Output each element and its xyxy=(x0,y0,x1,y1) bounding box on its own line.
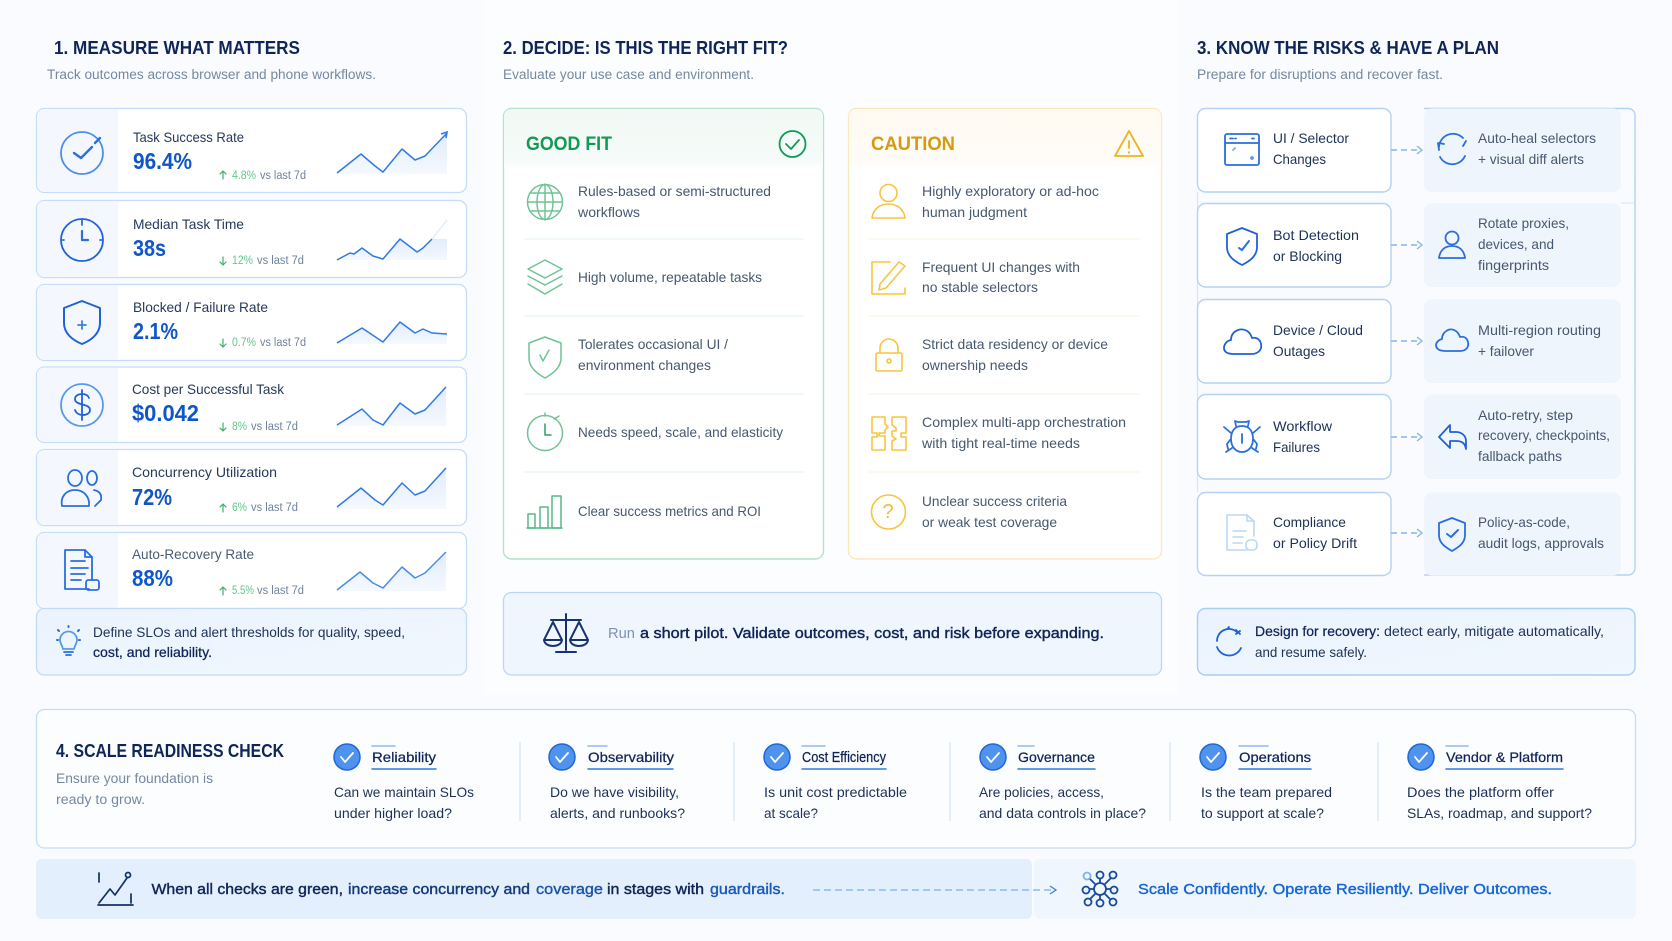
check item: cost efficiency: Cost Efficiency xyxy=(802,749,886,766)
metric card: median task time: 12% xyxy=(232,255,253,267)
risk row: workflow failures: Workflow xyxy=(1273,418,1333,434)
arrow xyxy=(1391,433,1422,441)
arrow xyxy=(1391,241,1422,249)
risk row: compliance drift xyxy=(1198,492,1621,576)
item: success metrics xyxy=(527,496,761,528)
banner: scale confidently: Scale Confidently. Operate Resiliently. Deliver Outcomes. xyxy=(1138,881,1552,898)
item: tolerates changes xyxy=(529,336,728,378)
sparkline xyxy=(337,468,446,509)
icon: clock xyxy=(61,219,103,261)
panel: know the risks xyxy=(1197,37,1635,675)
risk row: workflow failures: recovery, checkpoints, xyxy=(1478,427,1610,443)
check item: operations: Operations xyxy=(1239,749,1311,765)
text: scale readiness description: Ensure your foundation is xyxy=(56,771,213,786)
panel: good fit xyxy=(504,108,824,559)
icon: person xyxy=(872,184,905,218)
check item: observability: Do we have visibility, xyxy=(550,784,679,800)
panel: scale readiness check xyxy=(36,710,1636,848)
risk row: compliance drift: audit logs, approvals xyxy=(1478,535,1604,551)
check item: reliability: under higher load? xyxy=(334,805,452,821)
metric card: concurrency utilization: 6% xyxy=(232,502,247,514)
metric card: concurrency utilization xyxy=(36,450,466,526)
icon: document xyxy=(65,550,99,590)
item: rules-based xyxy=(528,183,771,220)
icon: refresh xyxy=(1438,134,1466,164)
icon: shield check xyxy=(529,337,561,378)
metric card: blocked failure rate: vs last 7d xyxy=(260,337,306,349)
subheading: measure: Track outcomes across browser and phone workflows. xyxy=(47,67,376,82)
risk row: workflow failures: Failures xyxy=(1273,439,1320,455)
item: rules-based: workflows xyxy=(577,204,640,220)
metric card: auto-recovery rate: 88% xyxy=(132,565,173,591)
panel: decide fit xyxy=(503,37,1162,675)
icon: return arrow xyxy=(1439,425,1466,449)
metric card: blocked failure rate: 0.7% xyxy=(232,337,256,349)
metric card: median task time: 38s xyxy=(133,235,166,261)
item: orchestration: Complex multi-app orchestration xyxy=(922,414,1126,430)
arrow xyxy=(1391,146,1422,154)
item: orchestration: with tight real-time needs xyxy=(921,435,1080,451)
callout: define SLOs: Define SLOs and alert thresholds for quality, speed, xyxy=(93,624,405,640)
risk row: UI selector changes: Auto-heal selectors xyxy=(1478,130,1596,146)
callout: design for recovery: and resume safely. xyxy=(1255,644,1367,660)
icon: cloud xyxy=(1436,329,1468,351)
sparkline xyxy=(337,220,447,260)
item: orchestration xyxy=(872,414,1126,451)
check item: operations: to support at scale? xyxy=(1201,805,1324,821)
arrow: checks to outcome xyxy=(813,886,1056,894)
metric card: cost per successful task: $0.042 xyxy=(132,400,199,426)
icon: people xyxy=(62,470,101,506)
icon: stacked layers xyxy=(528,260,562,294)
item: exploratory: human judgment xyxy=(922,204,1027,220)
item: speed and scale xyxy=(528,413,783,450)
risk row: device cloud outages xyxy=(1198,300,1621,383)
icon: recovery loop xyxy=(1217,627,1241,656)
check item: operations: Is the team prepared xyxy=(1201,784,1332,800)
icon: cloud xyxy=(1224,329,1261,354)
sparkline xyxy=(337,387,446,426)
metric card: concurrency utilization: vs last 7d xyxy=(251,502,298,514)
check item: governance: and data controls in place? xyxy=(979,805,1146,821)
risk row: bot detection: Bot Detection xyxy=(1273,227,1359,243)
check item: governance: Governance xyxy=(1018,749,1095,765)
metric card: task success rate: 96.4% xyxy=(133,148,192,174)
item: data residency xyxy=(876,336,1108,373)
panel: measure what matters xyxy=(36,37,466,675)
callout: design for recovery: Design for recovery: xyxy=(1255,623,1380,639)
icon: globe xyxy=(528,184,562,220)
icon: shield xyxy=(64,301,100,344)
heading: good fit: GOOD FIT xyxy=(526,134,612,155)
icon: check circle xyxy=(780,131,806,157)
icon: puzzle xyxy=(872,417,906,450)
icon: balance scales xyxy=(544,614,588,652)
icon: bug xyxy=(1224,421,1260,452)
metric card: auto-recovery rate: 5.5% xyxy=(232,585,254,597)
banner: increase concurrency: in stages with xyxy=(607,881,704,898)
check item: cost efficiency: Is unit cost predictable xyxy=(764,784,907,800)
risk row: UI selector changes: Changes xyxy=(1273,151,1326,167)
item: high volume xyxy=(528,260,762,294)
icon: network xyxy=(1082,872,1118,906)
icon: shield xyxy=(1227,228,1257,265)
heading: caution: CAUTION xyxy=(871,134,955,155)
callout: run a short pilot: a short pilot. Validate outcomes, cost, and risk before expanding. xyxy=(640,625,1104,642)
icon: warning triangle xyxy=(1115,131,1143,156)
item: frequent UI changes xyxy=(872,259,1080,295)
sparkline xyxy=(337,132,447,174)
metric card: task success rate: vs last 7d xyxy=(260,170,306,182)
check item: reliability xyxy=(334,744,474,821)
item: unclear success xyxy=(872,493,1067,530)
banner: increase concurrency: guardrails. xyxy=(710,881,785,898)
icon: person xyxy=(1439,232,1465,258)
metric card: auto-recovery rate: Auto-Recovery Rate xyxy=(132,546,254,562)
banner: increase concurrency: coverage xyxy=(536,881,603,898)
heading: scale readiness: 4. SCALE READINESS CHECK xyxy=(56,740,285,761)
sparkline xyxy=(337,322,447,344)
callout: run a short pilot xyxy=(504,592,1162,675)
check item: governance: Are policies, access, xyxy=(979,784,1104,800)
risk row: bot detection: Rotate proxies, xyxy=(1478,215,1569,231)
callout: define SLOs: cost, and reliability. xyxy=(93,644,212,660)
metric card: blocked failure rate: Blocked / Failure Rate xyxy=(133,299,268,315)
risk row: UI selector changes: + visual diff alerts xyxy=(1478,151,1584,167)
icon: light bulb xyxy=(57,626,80,655)
risk row: bot detection: devices, and xyxy=(1478,236,1554,252)
check item: reliability: Can we maintain SLOs xyxy=(334,784,474,800)
risk row: UI selector changes xyxy=(1198,108,1621,192)
check item: vendor and platform xyxy=(1407,744,1592,821)
risk row: device cloud outages: Outages xyxy=(1273,343,1325,359)
item: high volume: High volume, repeatable tasks xyxy=(578,269,762,285)
risk row: bot detection: fingerprints xyxy=(1478,257,1549,273)
metric card: task success rate xyxy=(36,108,466,192)
item: speed and scale: Needs speed, scale, and elasticity xyxy=(578,424,783,440)
icon: check target xyxy=(61,132,103,174)
metric card: cost per successful task: Cost per Successful Task xyxy=(132,381,285,397)
risk row: compliance drift: or Policy Drift xyxy=(1273,535,1357,551)
metric card: task success rate: Task Success Rate xyxy=(133,129,244,145)
check item: vendor and platform: SLAs, roadmap, and support? xyxy=(1407,805,1592,821)
text: scale readiness description xyxy=(56,771,213,807)
item: data residency: Strict data residency or device xyxy=(922,336,1108,352)
metric card: cost per successful task: 8% xyxy=(232,421,247,433)
item: frequent UI changes: Frequent UI changes with xyxy=(922,259,1080,275)
icon: browser window xyxy=(1225,134,1259,165)
callout: design for recovery xyxy=(1198,608,1635,675)
text: scale readiness description: ready to grow. xyxy=(56,792,145,807)
heading: risks: 3. KNOW THE RISKS & HAVE A PLAN xyxy=(1197,37,1499,58)
risk row: compliance drift: Compliance xyxy=(1273,514,1346,530)
metric card: auto-recovery rate: vs last 7d xyxy=(257,585,304,597)
subheading: decide: Evaluate your use case and environment. xyxy=(503,67,754,82)
subheading: risks: Prepare for disruptions and recover fast. xyxy=(1197,67,1443,82)
metric card: blocked failure rate: 2.1% xyxy=(133,318,178,344)
risk row: device cloud outages: Device / Cloud xyxy=(1273,322,1363,338)
banner: increase concurrency xyxy=(36,859,1032,919)
callout: define SLOs xyxy=(36,608,466,675)
metric card: cost per successful task: vs last 7d xyxy=(251,421,298,433)
check item: cost efficiency xyxy=(764,744,907,821)
risk row: device cloud outages: Multi-region routing xyxy=(1478,322,1601,338)
icon: rising chart xyxy=(98,872,133,905)
metric card: median task time xyxy=(36,200,466,278)
check item: vendor and platform: Does the platform offer xyxy=(1407,784,1554,800)
icon: stopwatch xyxy=(528,413,562,450)
metric card: concurrency utilization: 72% xyxy=(132,484,172,510)
risk row: UI selector changes: UI / Selector xyxy=(1273,130,1349,146)
item: exploratory: Highly exploratory or ad-hoc xyxy=(922,183,1099,199)
check item: observability xyxy=(549,744,685,821)
icon: pencil on page xyxy=(872,262,905,294)
icon: lock xyxy=(876,339,902,371)
metric card: auto-recovery rate xyxy=(36,532,466,608)
metric card: task success rate: 4.8% xyxy=(232,170,256,182)
risk row: workflow failures: fallback paths xyxy=(1478,448,1562,464)
panel: caution xyxy=(848,108,1162,559)
risk row: bot detection: or Blocking xyxy=(1273,248,1342,264)
item: success metrics: Clear success metrics and ROI xyxy=(578,503,761,519)
banner: scale confidently xyxy=(1034,859,1636,919)
heading: measure: 1. MEASURE WHAT MATTERS xyxy=(54,37,300,58)
check item: cost efficiency: at scale? xyxy=(764,805,818,821)
metric card: median task time: vs last 7d xyxy=(257,255,304,267)
banner: increase concurrency: increase concurrency and xyxy=(348,881,530,898)
risk row: compliance drift: Policy-as-code, xyxy=(1478,514,1570,530)
risk row: bot detection xyxy=(1198,204,1621,287)
icon: shield check xyxy=(1439,518,1465,551)
icon: question mark: ? xyxy=(882,501,894,523)
icon: dollar coin xyxy=(61,384,103,426)
item: tolerates changes: Tolerates occasional UI / xyxy=(578,336,728,352)
metric card: cost per successful task xyxy=(36,367,466,442)
metric card: median task time: Median Task Time xyxy=(133,216,244,232)
arrow xyxy=(1391,529,1422,537)
callout: design for recovery: detect early, mitigate automatically, xyxy=(1384,623,1604,639)
check item: vendor and platform: Vendor & Platform xyxy=(1446,749,1563,765)
item: frequent UI changes: no stable selectors xyxy=(922,279,1038,295)
check item: governance xyxy=(979,744,1146,821)
item: tolerates changes: environment changes xyxy=(578,357,711,373)
risk row: workflow failures: Auto-retry, step xyxy=(1478,407,1573,423)
callout: run a short pilot: Run xyxy=(608,625,635,642)
item: unclear success: or weak test coverage xyxy=(922,514,1057,530)
icon: question mark xyxy=(872,495,906,529)
item: exploratory xyxy=(872,183,1099,220)
heading: decide: 2. DECIDE: IS THIS THE RIGHT FIT? xyxy=(503,37,788,58)
check item: observability: alerts, and runbooks? xyxy=(550,805,685,821)
item: unclear success: Unclear success criteria xyxy=(922,493,1067,509)
risk row: device cloud outages: + failover xyxy=(1478,343,1534,359)
check item: reliability: Reliability xyxy=(372,749,436,765)
check item: observability: Observability xyxy=(588,749,674,765)
icon: bars xyxy=(527,496,562,528)
metric card: blocked failure rate xyxy=(36,284,466,360)
banner: increase concurrency: When all checks are green, xyxy=(152,881,343,898)
arrow xyxy=(1391,337,1422,345)
risk row: workflow failures xyxy=(1198,394,1621,479)
check item: operations xyxy=(1200,744,1332,821)
item: data residency: ownership needs xyxy=(922,357,1028,373)
item: rules-based: Rules-based or semi-structured xyxy=(578,183,771,199)
metric card: concurrency utilization: Concurrency Utilization xyxy=(132,464,277,480)
icon: faded document xyxy=(1227,515,1257,550)
sparkline xyxy=(337,552,446,591)
